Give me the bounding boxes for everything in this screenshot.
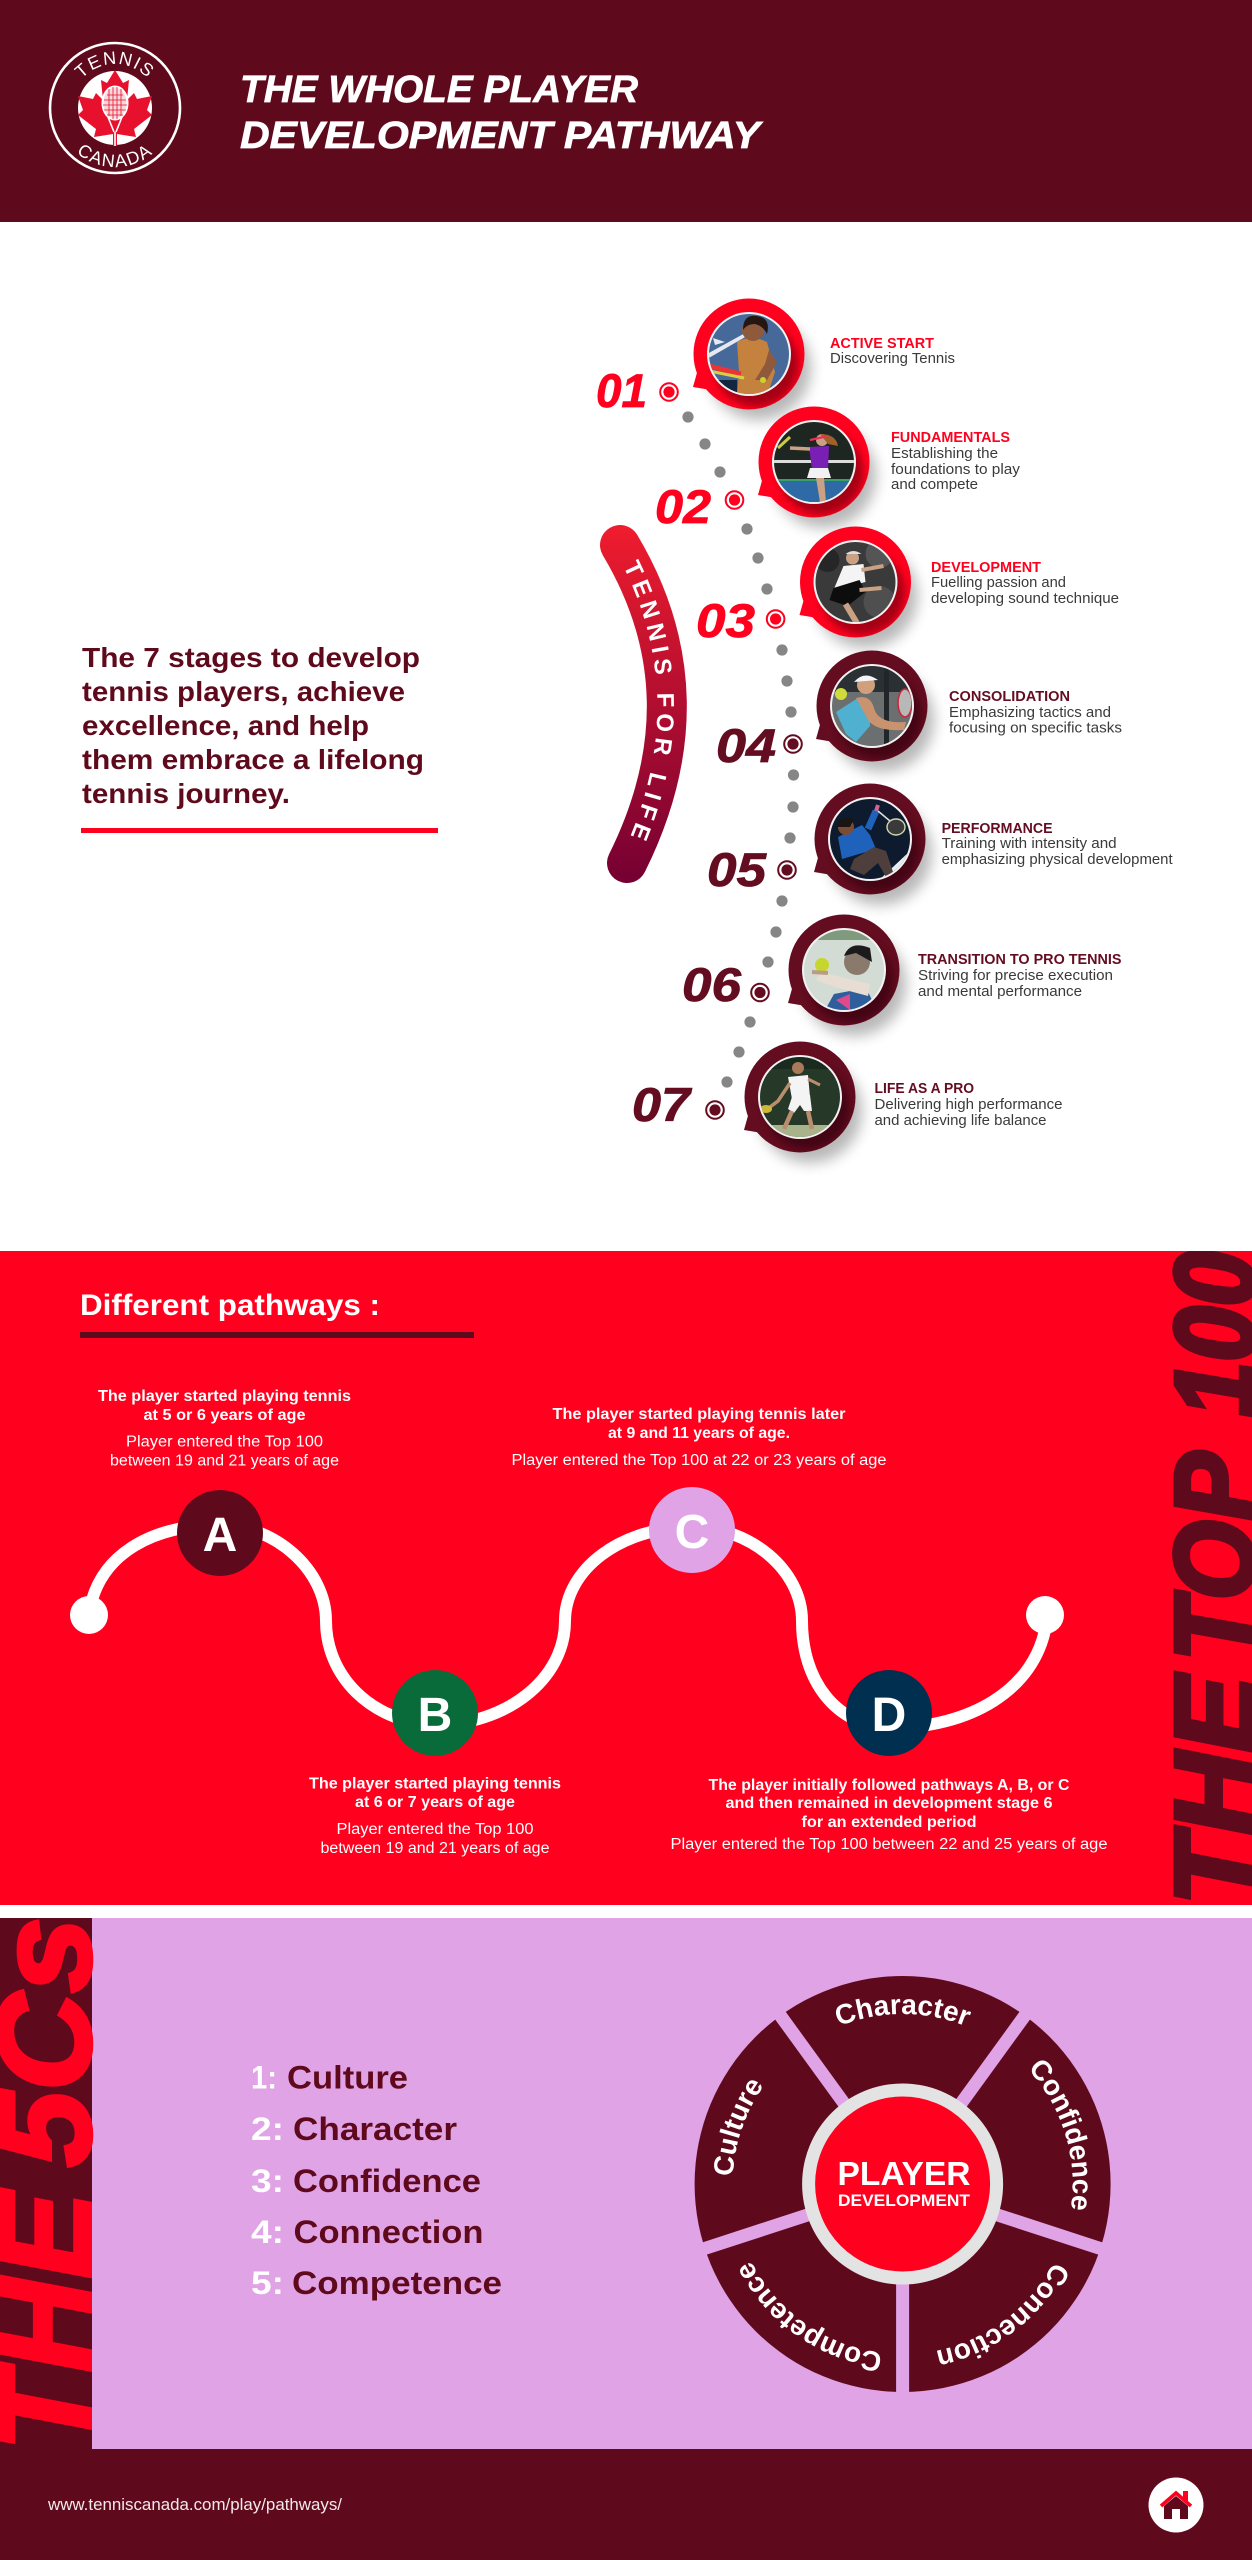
text: transition to pro tennis: Striving for precise execution (918, 968, 1113, 984)
text: pathway A: The player started playing tennis (98, 1388, 351, 1405)
text: pathway B (309, 1776, 561, 1857)
list of the 5Cs: Confidence (293, 2163, 481, 2199)
number 04: 04 (716, 719, 776, 772)
number 05: 05 (707, 843, 767, 896)
footer url: www.tenniscanada.com/play/pathways/ (47, 2495, 342, 2514)
list of the 5Cs: 2: (251, 2111, 284, 2147)
stage 03 (696, 526, 1119, 648)
text: consolidation: focusing on specific tasks (949, 720, 1122, 736)
text: pathway C: at 9 and 11 years of age. (608, 1425, 790, 1442)
text: development: Fuelling passion and (931, 575, 1066, 591)
wedge label: character: Character (836, 1998, 972, 2025)
text: development: DEVELOPMENT (931, 560, 1041, 576)
centre hub: player development (802, 2084, 1003, 2284)
centre hub: player development: PLAYER (838, 2155, 971, 2192)
footer band (0, 2449, 1252, 2560)
stage 07 (632, 1042, 1062, 1163)
text: fundamentals: FUNDAMENTALS (891, 430, 1010, 446)
number 01: 01 (596, 364, 647, 417)
list of the 5Cs: 1: (251, 2060, 277, 2096)
vertical title: the top 100 (1172, 1251, 1252, 1900)
text: active start: Discovering Tennis (830, 351, 955, 367)
text: development (931, 560, 1119, 607)
stage 05 (707, 784, 1173, 905)
title: THE WHOLE PLAYER (240, 69, 639, 111)
text: pathway D: for an extended period (802, 1814, 976, 1831)
text: pathway C (512, 1406, 886, 1469)
bubble: transition photo (788, 914, 906, 1036)
curved banner: tennis for life (600, 525, 687, 883)
marker 05 (778, 861, 796, 879)
node B (392, 1670, 478, 1756)
header band (0, 0, 1252, 222)
wedge label: connection: Connection (937, 2266, 1068, 2364)
text: pathway B: Player entered the Top 100 (336, 1821, 534, 1838)
node C (649, 1487, 735, 1573)
text: transition to pro tennis: TRANSITION TO PRO TENNIS (918, 952, 1122, 968)
node C: C (675, 1506, 709, 1559)
stage 01 (596, 298, 955, 420)
marker 07 (706, 1101, 724, 1119)
marker 02 (726, 491, 743, 509)
logo: Tennis Canada: CANADA (79, 145, 152, 168)
icon: home button (1148, 2478, 1204, 2532)
intro text block: tennis players, achieve (82, 676, 405, 707)
text: consolidation: Emphasizing tactics and (949, 705, 1111, 721)
number 06: 06 (682, 958, 742, 1011)
bubble: fundamentals photo (758, 406, 876, 528)
bubble: active start photo (693, 298, 811, 420)
title (240, 69, 764, 157)
text: pathway A: between 19 and 21 years of age (110, 1452, 339, 1470)
text: pathway D: The player initially followed pathways A, B, or C (708, 1777, 1070, 1794)
text: active start: ACTIVE START (830, 336, 934, 352)
text: performance: Training with intensity and (942, 836, 1117, 852)
node D (846, 1670, 932, 1756)
marker 03 (767, 610, 784, 628)
logo: Tennis Canada: TENNIS (74, 52, 154, 76)
wheel diagram (694, 1976, 1111, 2392)
text: life as a pro (874, 1081, 1062, 1129)
bubble: performance photo (814, 784, 932, 905)
wedge label: confidence: Confidence (1032, 2060, 1088, 2210)
text: pathway B: at 6 or 7 years of age (355, 1794, 515, 1811)
text: fundamentals: and compete (891, 477, 978, 493)
list of the 5Cs: 3: (251, 2163, 284, 2199)
intro text block: tennis journey. (82, 778, 290, 809)
text: fundamentals: foundations to play (891, 462, 1021, 478)
text: fundamentals: Establishing the (891, 446, 998, 462)
panel: the 5Cs (0, 1918, 1252, 2449)
text: pathway D: Player entered the Top 100 between 22 and 25 years of age (670, 1836, 1108, 1853)
list of the 5Cs: Culture (287, 2060, 408, 2096)
text: transition to pro tennis (918, 952, 1122, 1000)
stage 04 (716, 650, 1122, 772)
intro text block (81, 642, 438, 833)
text: pathway A: at 5 or 6 years of age (144, 1407, 306, 1424)
text: fundamentals (891, 430, 1021, 493)
marker 04 (784, 735, 802, 753)
path start dot (70, 1596, 108, 1634)
dotted timeline (682, 411, 799, 1088)
text: consolidation (949, 689, 1122, 736)
list of the 5Cs: Connection (294, 2214, 484, 2250)
list of the 5Cs: Character (293, 2111, 457, 2147)
bubble: development photo (800, 526, 918, 648)
text: pathway B: between 19 and 21 years of age (320, 1840, 550, 1857)
text: performance: PERFORMANCE (942, 821, 1053, 837)
text: life as a pro: LIFE AS A PRO (874, 1081, 974, 1097)
text: pathway B: The player started playing tennis (309, 1776, 561, 1792)
logo: Tennis Canada (48, 42, 182, 174)
intro text block: excellence, and help (82, 710, 369, 741)
wedge label: competence: Competence (740, 2263, 880, 2371)
text: pathway A (98, 1388, 351, 1470)
text: development: developing sound technique (931, 591, 1119, 607)
node D: D (872, 1689, 906, 1742)
node B: B (418, 1689, 452, 1742)
text: consolidation: CONSOLIDATION (949, 689, 1070, 705)
text: performance (942, 821, 1173, 868)
path end dot (1026, 1596, 1064, 1634)
number 02: 02 (655, 480, 711, 533)
bubble: life as a pro photo (744, 1042, 862, 1163)
centre hub: player development: DEVELOPMENT (838, 2191, 971, 2210)
number 07: 07 (632, 1078, 692, 1131)
list of the 5Cs: 5: (251, 2265, 284, 2301)
text: pathway C: Player entered the Top 100 at 22 or 23 years of age (512, 1452, 886, 1469)
text: pathway D: and then remained in development stage 6 (726, 1795, 1053, 1812)
list of the 5Cs: Competence (292, 2265, 502, 2301)
node A: A (203, 1509, 237, 1562)
text: pathway C: The player started playing tennis later (552, 1406, 846, 1423)
text: pathway D (670, 1777, 1108, 1853)
text: pathway A: Player entered the Top 100 (126, 1434, 323, 1450)
heading: different pathways (80, 1289, 474, 1338)
text: active start (830, 336, 955, 367)
intro text block: them embrace a lifelong (82, 744, 424, 775)
node A (177, 1490, 263, 1576)
panel: different pathways (0, 1251, 1252, 1905)
heading: different pathways: Different pathways : (80, 1289, 380, 1322)
vertical title: the 5Cs (0, 1919, 94, 2444)
text: life as a pro: and achieving life balance (874, 1113, 1046, 1129)
curved banner: tennis for life: TENNIS FOR LIFE (626, 558, 674, 841)
title: DEVELOPMENT PATHWAY (240, 115, 764, 157)
wedge label: culture: Culture (714, 2080, 762, 2175)
text: transition to pro tennis: and mental performance (918, 984, 1082, 1000)
bubble: consolidation photo (816, 650, 934, 772)
stage 02 (655, 406, 1021, 533)
stage 06 (682, 914, 1122, 1036)
number 03: 03 (696, 594, 755, 647)
text: life as a pro: Delivering high performance (874, 1097, 1062, 1113)
text: performance: emphasizing physical development (942, 852, 1173, 868)
intro text block: The 7 stages to develop (82, 642, 420, 673)
marker 06 (751, 984, 769, 1001)
marker 01 (660, 383, 678, 401)
wavy pathway line (92, 1525, 1046, 1728)
list of the 5Cs: 4: (251, 2214, 284, 2250)
list of the 5Cs (251, 2060, 502, 2301)
